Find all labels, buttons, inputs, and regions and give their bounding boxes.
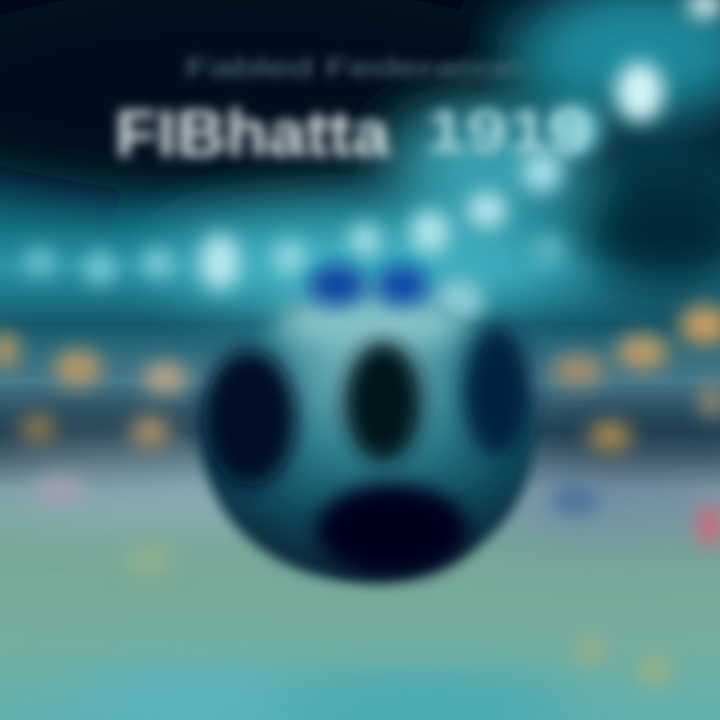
title text: blurred heading (115, 52, 590, 170)
ball body (202, 298, 534, 582)
ball top glow (277, 292, 467, 352)
ball panels (204, 328, 531, 576)
main title year: 1919 (425, 98, 590, 165)
crowd lights: warm bokeh (0, 305, 720, 686)
main title: FIBhatta (115, 96, 391, 170)
subtitle: Fabled Federation (185, 52, 525, 83)
soccer ball (202, 265, 534, 582)
stadium floodlights (24, 0, 720, 320)
blue logo patch (309, 265, 428, 305)
